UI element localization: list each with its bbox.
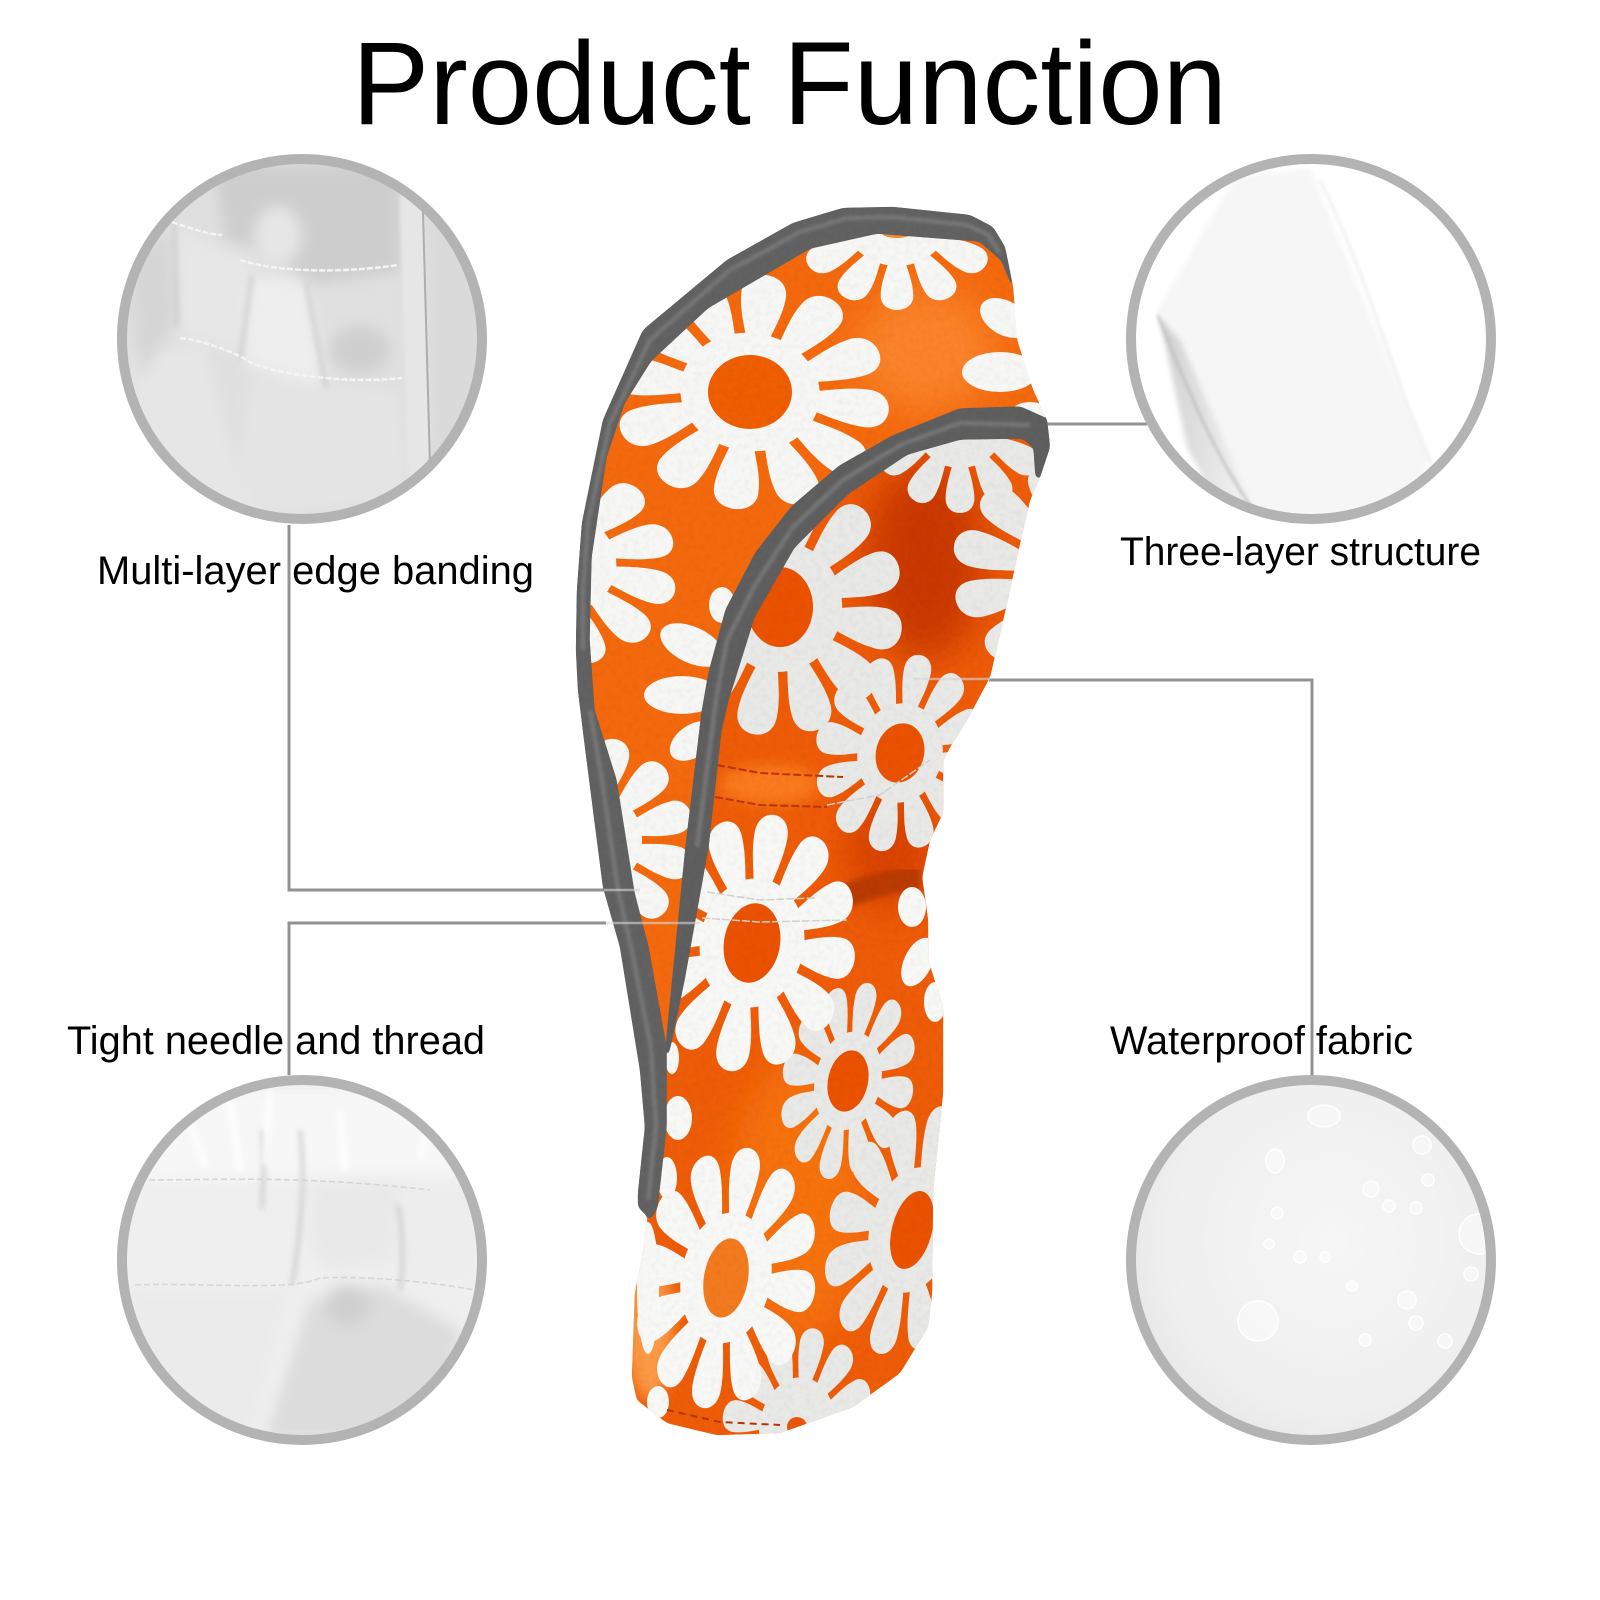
panel: three-layer structure detail	[1130, 150, 1500, 530]
label: multi-layer edge banding: Multi-layer edge banding	[97, 549, 534, 593]
daisies: back panel	[590, 234, 1046, 919]
panel: waterproof fabric detail	[1130, 1070, 1500, 1450]
ring	[122, 1080, 482, 1440]
stitching	[667, 760, 930, 1425]
leather grain overlay	[608, 308, 1009, 1402]
infographic: product function	[68, 38, 1496, 1445]
panel: tight needle and thread detail	[120, 1070, 490, 1450]
band: front panel piping	[667, 408, 1050, 1057]
ring	[1131, 1080, 1491, 1440]
product: orange daisy golf head cover	[576, 206, 1050, 1436]
ring	[1131, 159, 1491, 519]
label: tight needle and thread: Tight needle and thread	[67, 1019, 485, 1063]
gathered seam	[823, 878, 920, 905]
back panel	[590, 234, 1046, 1436]
front panel	[632, 439, 1040, 1435]
daisies: front panel	[722, 439, 1040, 1434]
label: three-layer structure: Three-layer structure	[1120, 530, 1481, 574]
title: Product Function	[352, 18, 1227, 150]
ring	[122, 159, 482, 519]
faint connector continuation	[604, 679, 990, 923]
label: waterproof fabric: Waterproof fabric	[1110, 1019, 1413, 1063]
band: outer piping	[576, 207, 1013, 1219]
connector lines	[289, 424, 1312, 1075]
panel: multi-layer edge banding detail	[120, 150, 490, 530]
water droplets	[1238, 1105, 1499, 1348]
